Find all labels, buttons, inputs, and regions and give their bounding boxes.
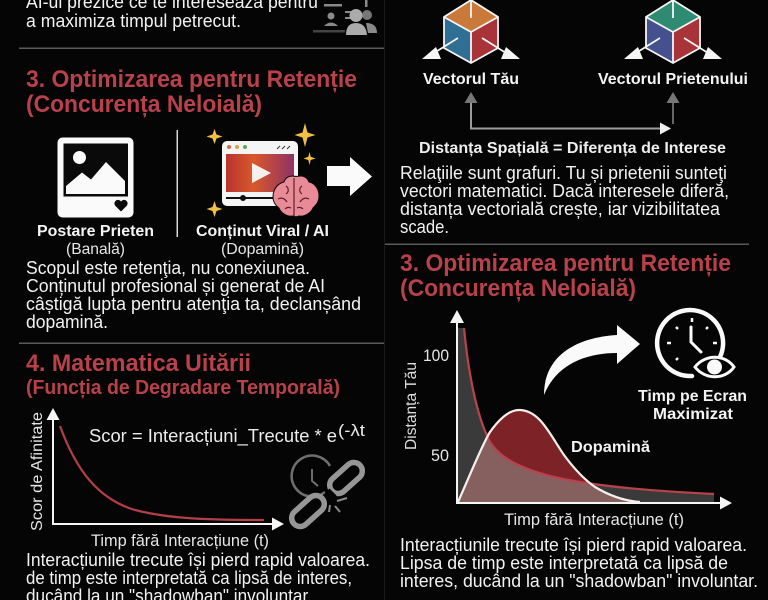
- heading: section 3 left: [26, 66, 357, 118]
- text block: decay explanation right: Interacțiunile trecute își pierd rapid valoarea.: [400, 535, 747, 555]
- text block: decay explanation right: [400, 535, 758, 591]
- icon: friend post photo: [58, 138, 134, 218]
- chart: retention and dopamine curves: 50: [431, 446, 449, 465]
- label: friend post: (Banală): [66, 241, 125, 258]
- chart: affinity decay curve: Scor de Afinitate: [29, 412, 46, 531]
- text block: vectors explanation: scade.: [400, 217, 449, 237]
- text block: vectors explanation: distanța vectorială crește, iar vizibilitatea: [400, 199, 721, 219]
- chart: retention and dopamine curves: Dopamină: [571, 439, 650, 456]
- icon: friend vector cube: [624, 0, 722, 63]
- label: friend post: [37, 223, 154, 258]
- label: screen time maximized: Timp pe Ecran: [638, 388, 747, 405]
- label: your vector: Vectorul Tău: [423, 71, 519, 88]
- text block: intro prediction: a maximiza timpul petrecut.: [26, 11, 241, 31]
- divider: between post types: [176, 130, 178, 237]
- label: viral content: Conținut Viral / AI: [196, 223, 329, 240]
- label: screen time maximized: Maximizat: [653, 406, 734, 423]
- chart: affinity decay curve: [29, 408, 284, 550]
- label: viral content: [196, 223, 329, 258]
- chart: retention and dopamine curves: 100: [423, 346, 449, 365]
- heading: section 3 left: 3. Optimizarea pentru Retenție: [26, 66, 357, 93]
- text block: vectors explanation: Relaţiile sunt grafuri. Tu și prietenii sunteţi: [400, 163, 727, 183]
- heading: section 3 right: [400, 250, 731, 302]
- text block: decay explanation left: de timp este interpretată ca lipsă de interes,: [26, 568, 352, 588]
- icon: viral video with brain: [206, 123, 319, 217]
- formula: Scor = Interacțiuni_Trecute * e: [89, 426, 337, 447]
- label: screen time maximized: [638, 388, 747, 423]
- label: friend post: Postare Prieten: [37, 223, 154, 240]
- text block: retention explanation: câștigă lupta pentru atenţia ta, declanșând: [26, 294, 361, 314]
- arrow: curved to screen time: [544, 325, 640, 395]
- icon: people profile list: [313, 0, 377, 35]
- heading: section 3 right: 3. Optimizarea pentru Retenție: [400, 250, 731, 277]
- arrow: spatial distance connector: [464, 92, 680, 134]
- text block: vectors explanation: [400, 163, 729, 237]
- chart: retention and dopamine curves: [403, 310, 732, 529]
- heading: section 4: (Funcția de Degradare Temporală): [26, 377, 340, 399]
- label: viral content: (Dopamină): [221, 241, 304, 258]
- chart: retention and dopamine curves: Timp fără Interacțiune (t): [504, 510, 684, 529]
- icon: your vector cube: [422, 0, 520, 63]
- text block: retention explanation: Scopul este retenţia, nu conexiunea.: [26, 258, 310, 278]
- formula exponent: (-λt: [338, 422, 365, 440]
- text block: retention explanation: [26, 258, 361, 332]
- text block: decay explanation left: [26, 550, 370, 600]
- heading: section 3 right: (Concurența Neloială): [400, 275, 636, 302]
- icon: clock with eye: [657, 310, 734, 377]
- text block: retention explanation: Conținutul profesional și generat de AI: [26, 276, 325, 296]
- chart: retention and dopamine curves: Distanța Tău: [403, 362, 420, 450]
- text block: decay explanation left: Interacțiunile trecute își pierd rapid valoarea.: [26, 550, 370, 570]
- text block: retention explanation: dopamină.: [26, 312, 108, 332]
- text block: vectors explanation: vectori matematici. Dacă interesele diferă,: [400, 181, 729, 201]
- text block: decay explanation right: interes, ducând la un "shadowban" involuntar.: [400, 571, 758, 591]
- label: friend vector: Vectorul Prietenului: [598, 71, 748, 88]
- heading: section 4: [26, 350, 340, 399]
- heading: section 3 left: (Concurența Neloială): [26, 91, 262, 118]
- icon: clock and broken link: [288, 456, 366, 530]
- arrow: to retention: [327, 157, 372, 196]
- label: spatial distance: Distanța Spațială = Diferența de Interese: [419, 140, 726, 157]
- text block: intro prediction: [26, 0, 318, 31]
- text block: decay explanation right: Lipsa de timp este interpretată ca lipsă de: [400, 553, 728, 573]
- heading: section 4: 4. Matematica Uitării: [26, 350, 251, 377]
- chart: affinity decay curve: Timp fără Interacțiune (t): [91, 531, 269, 550]
